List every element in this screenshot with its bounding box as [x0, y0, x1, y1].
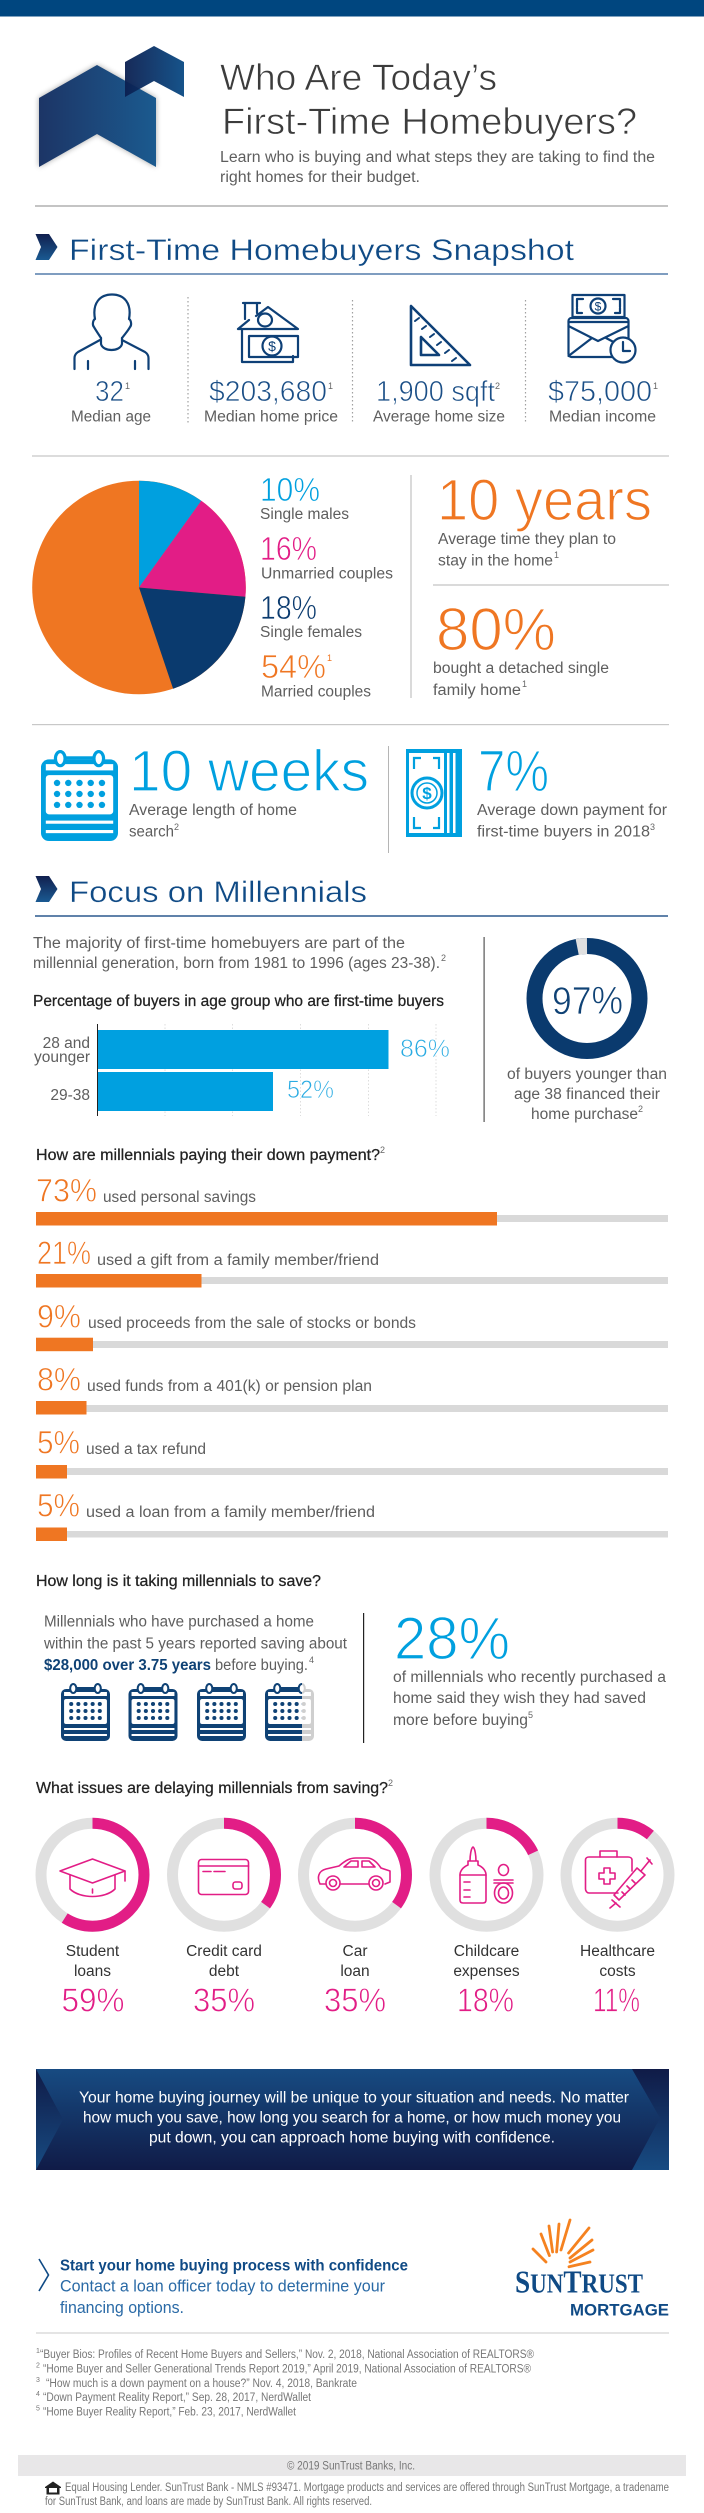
bar chart: first-time buyers by age: younger [34, 1049, 90, 1066]
ring: student loans: Student [66, 1943, 120, 1960]
stat: 7 percent: first-time buyers in 2018 [477, 824, 650, 841]
call to action: Start your home buying process with confidence [60, 2258, 408, 2275]
banner: closing message: how much you save, how long you search for a home, or how much money you [83, 2110, 621, 2127]
icon: envelope with money and clock: $ [595, 300, 602, 314]
icon: sunburst [533, 2220, 593, 2267]
text: saving amount: within the past 5 years reported saving about [43, 1636, 348, 1653]
text: saving amount [43, 1614, 348, 1674]
footnotes: 4 [36, 2391, 40, 2398]
icon: calendar [41, 752, 118, 841]
footnotes [36, 2348, 534, 2419]
stat: 7 percent: 3 [650, 822, 655, 832]
call to action: Contact a loan officer today to determine your [60, 2278, 385, 2296]
stat: 10 years: Average time they plan to [438, 531, 616, 548]
intro text: right homes for their budget. [220, 169, 420, 186]
stat: average home size: 1,900 sqft [376, 376, 495, 408]
footnotes: 3 [36, 2377, 40, 2384]
dividers [188, 297, 526, 423]
stat: median age: 1 [125, 381, 130, 391]
stat: 28 percent: 28% [394, 1605, 510, 1672]
pie legend: Single females [260, 624, 362, 641]
bar chart: first-time buyers by age: 86% [400, 1035, 450, 1063]
stat: 7 percent: Average down payment for [477, 802, 667, 819]
row: stocks or bonds: 9% [37, 1299, 81, 1335]
banner: closing message: put down, you can approach home buying with confidence. [149, 2130, 555, 2147]
ring: credit card debt [172, 1823, 276, 2019]
panel: snapshot stats [71, 294, 658, 426]
text: saving amount: Millennials who have purchased a home [44, 1614, 314, 1631]
heading: what issues: What issues are delaying millennials from saving? [36, 1780, 388, 1797]
stat: median income: 1 [653, 381, 658, 391]
pie legend: Single males [260, 506, 349, 523]
stat: 28 percent: more before buying [393, 1712, 528, 1729]
ring: car loan: 35% [324, 1982, 386, 2019]
ring: car loan: loan [340, 1963, 370, 1980]
stat: 28 percent: of millennials who recently purchased a [393, 1669, 666, 1686]
pie legend: 1 [327, 653, 332, 663]
stat: median income [548, 376, 658, 426]
stat: 10 years [437, 468, 652, 570]
stat: 28 percent: home said they wish they had saved [393, 1690, 646, 1707]
stat: median home price: Median home price [204, 409, 338, 426]
text: millennial intro: The majority of first-time homebuyers are part of the [33, 935, 405, 952]
call to action: financing options. [60, 2299, 184, 2317]
icon: person [74, 294, 148, 369]
row: gift: 21% [37, 1235, 91, 1271]
copyright band: © 2019 SunTrust Banks, Inc. [287, 2460, 415, 2472]
bar chart: first-time buyers by age: 29-38 [50, 1087, 90, 1104]
pie legend: 54% [261, 648, 326, 685]
stat: median age [71, 376, 151, 426]
icon: dollar bill stack: $ [422, 784, 432, 803]
ring: healthcare costs: 11% [593, 1982, 640, 2019]
progress bars: down payment sources [36, 1173, 668, 1541]
stat: average home size: 2 [495, 381, 500, 391]
text: financed caption: of buyers younger than [507, 1066, 667, 1083]
footnotes: “Buyer Bios: Profiles of Recent Home Buyers and Sellers,” Nov. 2, 2018, National Association of REALTORS® [40, 2349, 534, 2361]
title: Who Are Today’s [220, 57, 497, 98]
stat: 10 weeks: Average length of home [129, 802, 297, 819]
footnotes: “Home Buyer and Seller Generational Trends Report 2019,” April 2019, National Association of REALTORS® [43, 2364, 531, 2376]
intro text: Learn who is buying and what steps they are taking to find the [220, 149, 655, 166]
legal text [45, 2482, 669, 2508]
pie chart: buyer household types [32, 481, 246, 694]
stat: 7 percent [477, 739, 667, 841]
icon: car [318, 1858, 390, 1890]
ring: car loan: Car [343, 1943, 367, 1960]
row: loan [36, 1488, 668, 1541]
ring: childcare expenses: Childcare [454, 1943, 519, 1960]
panel: issue rings [41, 1823, 669, 2019]
stat: 7 percent: 7% [478, 739, 549, 804]
donut chart: 97 percent financed: 97% [552, 980, 623, 1023]
icon: credit card [198, 1860, 248, 1894]
stat: 28 percent [393, 1605, 666, 1729]
stat: median home price: $203,680 [209, 376, 327, 408]
ring: student loans: loans [74, 1963, 111, 1980]
heading: down payment: How are millennials paying their down payment? [36, 1147, 380, 1164]
call to action [39, 2258, 408, 2317]
row: stocks or bonds: used proceeds from the sale of stocks or bonds [88, 1315, 416, 1332]
copyright band [18, 2455, 686, 2476]
text: saving amount: 4 [309, 1655, 314, 1665]
row: personal savings [36, 1173, 668, 1226]
ring: student loans: 59% [62, 1982, 124, 2019]
ring: student loans [41, 1823, 144, 2019]
row: tax refund: used a tax refund [86, 1441, 206, 1458]
title: First-Time Homebuyers? [222, 101, 637, 142]
donut chart: 97 percent financed [534, 946, 640, 1051]
stat: 80 percent: 80% [436, 596, 556, 663]
icon: first aid kit and syringe [586, 1851, 652, 1908]
banner: closing message [36, 2069, 669, 2170]
stat: median income: $75,000 [548, 376, 652, 408]
banner: closing message: Your home buying journey will be unique to your situation and needs. No matter [79, 2090, 629, 2107]
text: saving amount: $28,000 over 3.75 years [44, 1657, 211, 1674]
heading: how long to save: How long is it taking millennials to save? [36, 1573, 321, 1590]
pie legend: Married couples [261, 684, 371, 701]
stat: average home size: Average home size [373, 409, 505, 426]
ring: car loan [304, 1823, 406, 2019]
row: 401k: used funds from a 401(k) or pension plan [87, 1378, 372, 1395]
text: millennial intro: 2 [441, 953, 446, 963]
text: financed caption: 2 [638, 1104, 643, 1114]
stat: 80 percent [433, 596, 609, 699]
stat: median income: Median income [549, 409, 656, 426]
stat: 10 years: 1 [554, 550, 559, 560]
row: gift [36, 1235, 668, 1288]
icon: set square [411, 306, 470, 365]
heading: First-Time Homebuyers Snapshot: First-Time Homebuyers Snapshot [69, 234, 575, 267]
ring: healthcare costs [566, 1823, 669, 2019]
stat: median home price [204, 376, 338, 426]
pie legend: 18% [260, 589, 317, 626]
pie legend: 16% [260, 530, 317, 567]
stat: median age: 32 [95, 376, 124, 408]
text: saving amount: before buying. [215, 1657, 308, 1674]
pie legend: Unmarried couples [261, 565, 393, 582]
bar chart: first-time buyers by age [34, 1024, 450, 1116]
logo: SunTrust Mortgage: MORTGAGE [570, 2301, 669, 2320]
ring: childcare expenses: 18% [457, 1982, 514, 2019]
title [220, 57, 637, 142]
ring: childcare expenses [435, 1823, 538, 2019]
row: loan: used a loan from a family member/friend [86, 1504, 375, 1521]
footnotes: 5 [36, 2406, 40, 2413]
icon: bottle and pacifier [460, 1847, 513, 1903]
stat: median home price: 1 [328, 381, 333, 391]
heading: percentage of buyers: Percentage of buyers in age group who are first-time buyers [33, 993, 444, 1010]
row: gift: used a gift from a family member/friend [97, 1252, 379, 1269]
stat: 28 percent: 5 [528, 1710, 533, 1720]
row: stocks or bonds [36, 1299, 668, 1351]
icon: house with dollar bill [238, 303, 298, 362]
row: tax refund: 5% [37, 1425, 80, 1461]
icon: dollar bill stack [406, 749, 462, 837]
stat: 80 percent: family home [433, 682, 521, 699]
text: financed caption [507, 1066, 667, 1123]
row: loan: 5% [37, 1488, 80, 1524]
stat: 10 years: 10 years [437, 468, 652, 533]
ring: credit card debt: Credit card [186, 1943, 262, 1960]
stat: average home size [373, 376, 505, 426]
heading: what issues: 2 [388, 1778, 393, 1788]
logo: SunTrust Mortgage: SUNTRUST [515, 2264, 643, 2300]
row: personal savings: 73% [36, 1173, 97, 1209]
stat: 80 percent: bought a detached single [433, 660, 609, 677]
pie legend: 10% [260, 471, 320, 508]
footnotes: “Home Buyer Reality Report,” Feb. 23, 2017, NerdWallet [43, 2407, 297, 2419]
stat: 10 years: stay in the home [438, 553, 553, 570]
stat: median age: Median age [71, 409, 151, 426]
stat: 10 weeks: 2 [174, 822, 179, 832]
stat: 10 weeks [129, 739, 369, 841]
footnotes: “How much is a down payment on a house?” Nov. 4, 2018, Bankrate [46, 2378, 357, 2390]
row: tax refund [36, 1425, 668, 1478]
icon: house with dollar bill: $ [268, 338, 276, 354]
icon: equal housing [45, 2482, 61, 2494]
icon: graduation cap [60, 1859, 125, 1896]
icon: envelope with money and clock [568, 295, 636, 362]
stat: 80 percent: 1 [522, 679, 527, 689]
stat: 10 weeks: search [129, 824, 174, 841]
stat: 10 weeks: 10 weeks [129, 739, 369, 804]
text: financed caption: age 38 financed their [514, 1086, 660, 1103]
text: millennial intro [33, 935, 446, 972]
ring: credit card debt: debt [209, 1963, 240, 1980]
footnotes: “Down Payment Reality Report,” Sep. 28, 2017, NerdWallet [43, 2392, 312, 2404]
ring: healthcare costs: costs [599, 1963, 636, 1980]
intro text [220, 149, 655, 186]
legal text: for SunTrust Bank, and loans are made by SunTrust Bank. All rights reserved. [45, 2496, 372, 2508]
ring: healthcare costs: Healthcare [580, 1943, 655, 1960]
icon: house logo [39, 46, 184, 167]
bar chart: first-time buyers by age: 52% [287, 1076, 334, 1104]
heading: Focus on Millennials: Focus on Millennials [69, 876, 367, 909]
top header bar [0, 0, 704, 16]
text: millennial intro: millennial generation, born from 1981 to 1996 (ages 23-38). [33, 955, 440, 972]
footnotes: 2 [36, 2363, 40, 2370]
icon row: 3.75 calendars [61, 1684, 314, 1741]
footnotes: 1 [36, 2348, 40, 2355]
row: 401k [36, 1362, 668, 1414]
pie legend [260, 471, 393, 701]
row: 401k: 8% [37, 1362, 81, 1398]
logo: SunTrust Mortgage [515, 2220, 669, 2320]
ring: credit card debt: 35% [193, 1982, 255, 2019]
heading: down payment: 2 [380, 1145, 385, 1155]
row: personal savings: used personal savings [103, 1189, 256, 1206]
ring: childcare expenses: expenses [453, 1963, 520, 1980]
text: financed caption: home purchase [531, 1106, 638, 1123]
bar chart: first-time buyers by age: 28 and [43, 1035, 90, 1052]
